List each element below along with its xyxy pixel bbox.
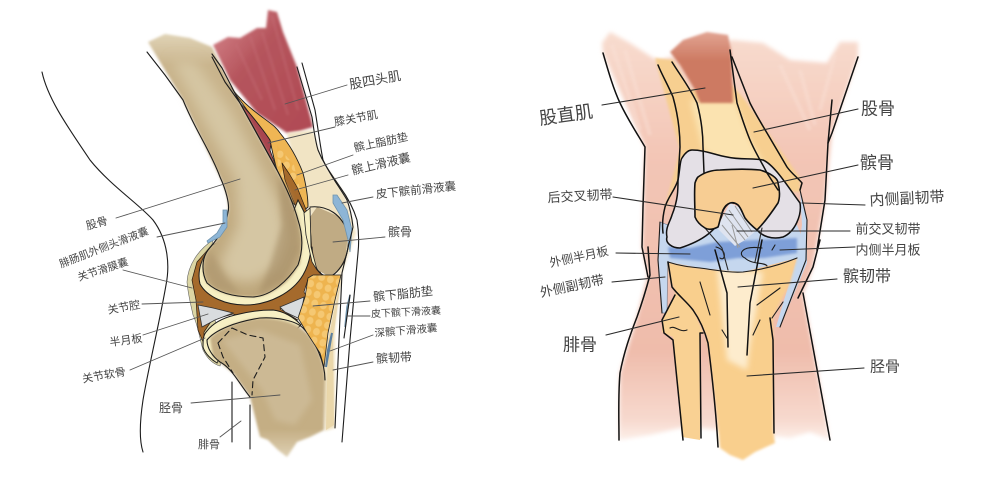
label: meniscus: 半月板 xyxy=(109,331,143,349)
label: synovial membrane: 关节滑膜囊 xyxy=(76,255,130,284)
label: patellar ligament: 髌韧带 xyxy=(843,268,891,286)
leader lines xyxy=(602,88,865,376)
subcutaneous infrapatellar bursa xyxy=(345,295,350,327)
label: infrapatellar fat pad: 髌下脂肪垫 xyxy=(372,283,434,304)
skin outline: back of leg xyxy=(42,72,168,452)
patellar cartilage xyxy=(304,208,317,270)
fibula xyxy=(662,293,703,440)
tibial cartilage xyxy=(203,310,301,363)
label: fibula: 腓骨 xyxy=(198,438,220,451)
label: patella: 髌骨 xyxy=(860,154,894,172)
rectus femoris xyxy=(670,32,733,103)
label: femur: 股骨 xyxy=(861,100,895,118)
fat pad texture xyxy=(277,145,304,205)
label: gastrocnemius bursa: 腓肠肌外侧头滑液囊 xyxy=(57,224,151,271)
label: lateral meniscus: 外侧半月板 xyxy=(548,244,610,270)
skin outlines: front of knee xyxy=(212,57,359,442)
label: posterior cruciate ligament: 后交叉韧带 xyxy=(547,187,613,205)
tendon shade xyxy=(326,273,342,430)
labels: frontal view xyxy=(538,88,945,376)
label: articularis genus: 膝关节肌 xyxy=(333,107,379,129)
label: tibia: 胫骨 xyxy=(159,401,183,415)
label: quadriceps: 股四头肌 xyxy=(348,68,402,92)
suprapatellar bursa and synovial cavity xyxy=(192,163,322,344)
label: suprapatellar bursa: 髌上滑液囊 xyxy=(350,149,412,178)
background muscle xyxy=(602,32,858,440)
label: articular cartilage: 关节软骨 xyxy=(81,364,127,386)
label: suprapatellar fat pad: 髌上脂肪垫 xyxy=(352,129,409,155)
infrapatellar fat pad xyxy=(298,275,341,367)
suprapatellar fat pad xyxy=(223,77,308,212)
label: subcutaneous infrapatellar bursa: 皮下髌下滑液囊 xyxy=(371,304,441,320)
label: anterior cruciate ligament: 前交叉韧带 xyxy=(855,222,921,236)
medial and lateral menisci xyxy=(660,225,803,272)
label: patellar ligament: 髌韧带 xyxy=(376,349,412,366)
bone and skin outlines xyxy=(603,50,858,447)
label: patella: 髌骨 xyxy=(388,224,412,239)
deep infrapatellar bursa xyxy=(326,333,332,367)
leader lines xyxy=(116,85,385,437)
label: fibula: 腓骨 xyxy=(563,336,597,354)
patella xyxy=(310,207,348,277)
condyles xyxy=(667,150,800,248)
patella xyxy=(695,169,780,230)
femur xyxy=(147,34,302,297)
label: tibia: 胫骨 xyxy=(870,358,900,376)
label: subcutaneous prepatellar bursa: 皮下髌前滑液囊 xyxy=(375,179,457,201)
panel: sagittal knee section xyxy=(42,10,359,457)
label: joint cavity: 关节腔 xyxy=(106,297,141,317)
label: femur: 股骨 xyxy=(85,214,109,233)
quadriceps muscle xyxy=(213,10,313,133)
femur xyxy=(655,58,800,215)
femoral cartilage xyxy=(199,200,311,305)
subcutaneous prepatellar bursa xyxy=(333,195,352,252)
label: lateral collateral ligament: 外侧副韧带 xyxy=(539,272,605,300)
posterior meniscus xyxy=(198,305,233,327)
tibia xyxy=(668,258,797,460)
labels: sagittal section xyxy=(57,68,457,451)
label: medial collateral ligament: 内侧副韧带 xyxy=(869,189,945,209)
gastrocnemius bursa xyxy=(207,210,227,243)
label: rectus femoris: 股直肌 xyxy=(538,101,594,129)
articularis genus muscle xyxy=(240,103,277,170)
fibula lines xyxy=(232,382,250,449)
collateral ligaments xyxy=(658,190,807,327)
label: medial meniscus: 内侧半月板 xyxy=(855,242,921,258)
anterior meniscus xyxy=(280,297,304,319)
cruciate ligaments xyxy=(705,203,762,270)
label: deep infrapatellar bursa: 深髌下滑液囊 xyxy=(374,321,438,340)
capsule xyxy=(187,240,225,366)
patellar tendon band xyxy=(287,130,356,431)
panel: frontal knee view xyxy=(602,32,858,460)
tibia xyxy=(207,318,325,457)
